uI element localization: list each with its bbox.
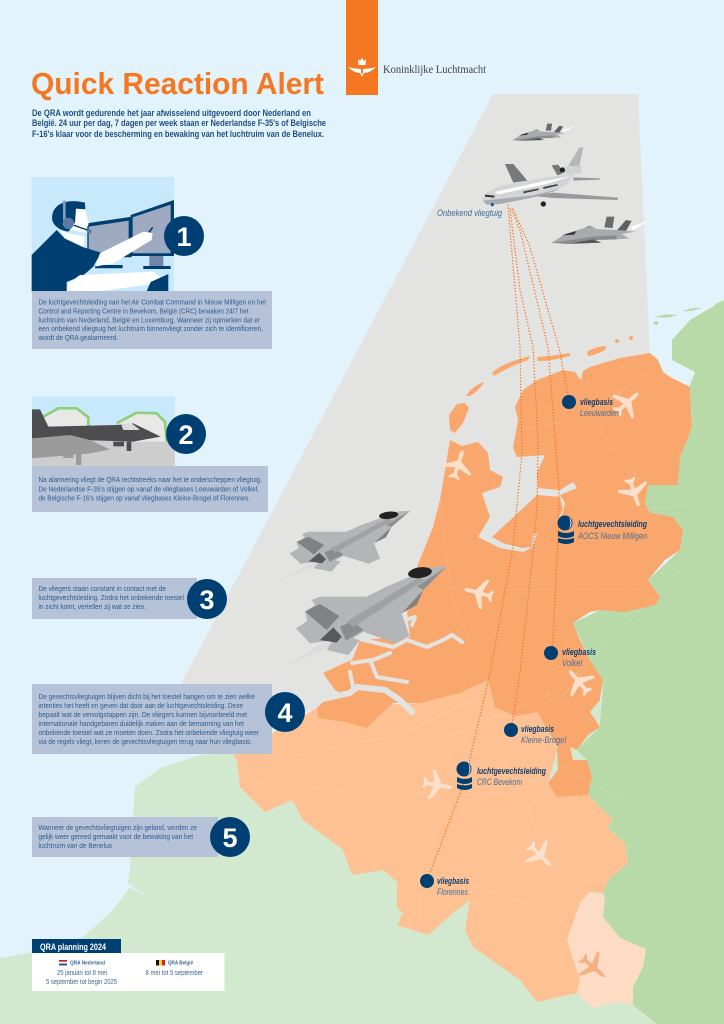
air control marker: CRC Bevekom: luchtgevechtsleiding	[477, 766, 546, 776]
map: Flevoland	[492, 495, 563, 548]
panel 4 text: onbekende toestel wat ze moeten doen. Zodra het onbekende vliegtuig weer	[38, 728, 259, 737]
panel 1 text	[32, 291, 272, 349]
panel 5 text: luchtruim van de Benelux	[38, 841, 112, 850]
fighter jet: upper large	[278, 511, 410, 581]
panel 1 text: Control and Reporting Centre in Bevekom, België (CRC) bewaken 24/7 het	[38, 306, 249, 316]
base marker: Volkel: Volkel	[562, 658, 583, 668]
base marker: Kleine-Brogel	[504, 723, 567, 745]
air control marker: CRC Bevekom: CRC Bevekom	[477, 777, 522, 787]
badge 5: 5	[222, 823, 238, 853]
panel 5 text: gelijk weer gereed gemaakt voor de bewaking van het	[38, 832, 194, 841]
intro text: België. 24 uur per dag, 7 dagen per week staan er Nederlandse F-35's of Belgische	[32, 118, 326, 128]
badge 5	[210, 817, 250, 857]
map: France and southern land	[0, 700, 724, 1024]
escort jet: upper small	[513, 124, 575, 141]
panel 3 text: De vliegers staan constant in contact met de	[38, 584, 166, 593]
panel 3 text: luchtgevechtsleiding. Zodra het onbekende toestel	[38, 593, 184, 602]
intro text: De QRA wordt gedurende het jaar afwisselend uitgevoerd door Nederland en	[32, 108, 311, 118]
base marker: Volkel: vliegbasis	[562, 647, 596, 657]
air control marker: AOCS Nieuw Milligen: AOCS Nieuw Milligen	[577, 531, 647, 541]
map: airplane icons	[420, 382, 653, 988]
badge 1: 1	[176, 222, 192, 252]
air control marker: CRC Bevekom	[456, 762, 546, 790]
QRA planning 2024: QRA planning 2024	[40, 942, 106, 952]
badge 2: 2	[178, 420, 194, 450]
base marker: Leeuwarden: vliegbasis	[580, 397, 613, 407]
QRA planning 2024: 25 januari tot 8 mei	[57, 968, 107, 977]
panel 4 text: De gevechtsvliegtuigen blijven dicht bij het toestel hangen om te zien welke	[38, 692, 255, 701]
QRA planning 2024: QRA Nederland	[70, 960, 105, 966]
panel 2 text: de Belgische F-16's stijgen op vanaf vliegbases Kleine-Brogel of Florennes.	[38, 494, 250, 502]
panel 4 text: internationale handgebaren duidelijk maken aan de bemanning van het	[38, 719, 245, 728]
intro text	[32, 108, 326, 139]
fighter jet: lower large	[282, 566, 447, 668]
label: unknown aircraft: Onbekend vliegtuig	[437, 208, 503, 219]
QRA planning 2024	[32, 939, 224, 991]
air control marker: AOCS Nieuw Milligen	[558, 516, 647, 544]
base marker: Volkel	[544, 646, 596, 668]
panel 1 text: De luchtgevechtsleiding van het Air Combat Command in Nieuw Milligen en het	[38, 298, 267, 306]
panel 3 text	[32, 578, 197, 619]
base marker: Leeuwarden	[562, 395, 619, 418]
badge 1	[164, 216, 204, 256]
air control marker: AOCS Nieuw Milligen: luchtgevechtsleiding	[578, 519, 647, 529]
base marker: Florennes: Florennes	[437, 887, 468, 897]
map: Wadden islands	[449, 336, 633, 433]
radar beam	[181, 94, 650, 720]
badge 3: 3	[199, 585, 215, 615]
base marker: Kleine-Brogel: vliegbasis	[521, 724, 554, 734]
panel 5 text: Wanneer de gevechtsvliegtuigen zijn geland, worden ze	[38, 823, 197, 832]
panel 4 text: via de regels vliegt, keren de gevechtsvliegtuigen terug naar hun vliegbasis.	[38, 737, 252, 746]
panel 3 text: in zicht komt, vertellen zij wat ze zien.	[38, 602, 146, 611]
escort jet: right	[552, 217, 651, 244]
map: Luxembourg	[567, 892, 646, 1008]
panel 4 text	[32, 684, 272, 754]
panel 2 text: De Nederlandse F-35's stijgen op vanaf de vliegbases Leeuwarden of Volkel,	[38, 484, 259, 494]
unknown airliner	[482, 147, 618, 207]
logo: Koninklijke Luchtmacht	[346, 0, 487, 95]
QRA planning 2024: 8 mei tot 5 september	[146, 968, 203, 977]
map: white dotted routes	[240, 370, 695, 935]
map: Belgium	[233, 680, 628, 1002]
panel 1 text: wordt de QRA gealarmeerd.	[38, 333, 118, 342]
badge 2	[166, 414, 206, 454]
QRA planning 2024: 5 september tot begin 2025	[46, 977, 117, 986]
panel 2 text: Na alarmering vliegt de QRA rechtstreeks naar het te onderscheppen vliegtuig.	[38, 475, 262, 484]
panel 2 text	[32, 466, 268, 512]
panel 1 text: een onbekend vliegtuig het luchtruim binnenvliegt zonder zich te identificeren,	[38, 324, 263, 333]
panel 1 illustration: air controller	[32, 177, 174, 291]
badge 4: 4	[277, 698, 293, 728]
intro text: F-16's klaar voor de bescherming en bewaking van het luchtruim van de Benelux.	[32, 129, 324, 139]
panel 1 text: luchtruim van Nederland, België en Luxemburg. Wanneer zij opmerken dat er	[38, 316, 260, 324]
base marker: Leeuwarden: Leeuwarden	[580, 408, 619, 418]
map: Netherlands	[317, 353, 692, 797]
map: northern German islands	[638, 301, 724, 333]
panel 2 illustration: jets on the base	[32, 397, 175, 466]
badge 3	[187, 579, 227, 619]
base marker: Florennes	[420, 874, 469, 897]
panel 4 text: intenties het heeft en geven dat door aan de luchtgevechtsleiding. Deze	[38, 701, 243, 710]
panel 4 text: bepaalt wat de vervolgstappen zijn. De vliegers kunnen bijvoorbeeld met	[38, 710, 248, 719]
base marker: Kleine-Brogel: Kleine-Brogel	[521, 735, 567, 745]
title: Quick Reaction Alert	[31, 66, 324, 101]
map: delta waterways	[305, 617, 462, 712]
panel 5 text	[32, 817, 218, 857]
flight routes: orange dotted lines	[427, 205, 569, 881]
logo: Koninklijke Luchtmacht: Koninklijke Luchtmacht	[383, 64, 487, 76]
map: Germany	[573, 300, 724, 1024]
badge 4	[265, 692, 305, 732]
QRA planning 2024: QRA België	[168, 960, 193, 966]
base marker: Florennes: vliegbasis	[437, 876, 469, 886]
